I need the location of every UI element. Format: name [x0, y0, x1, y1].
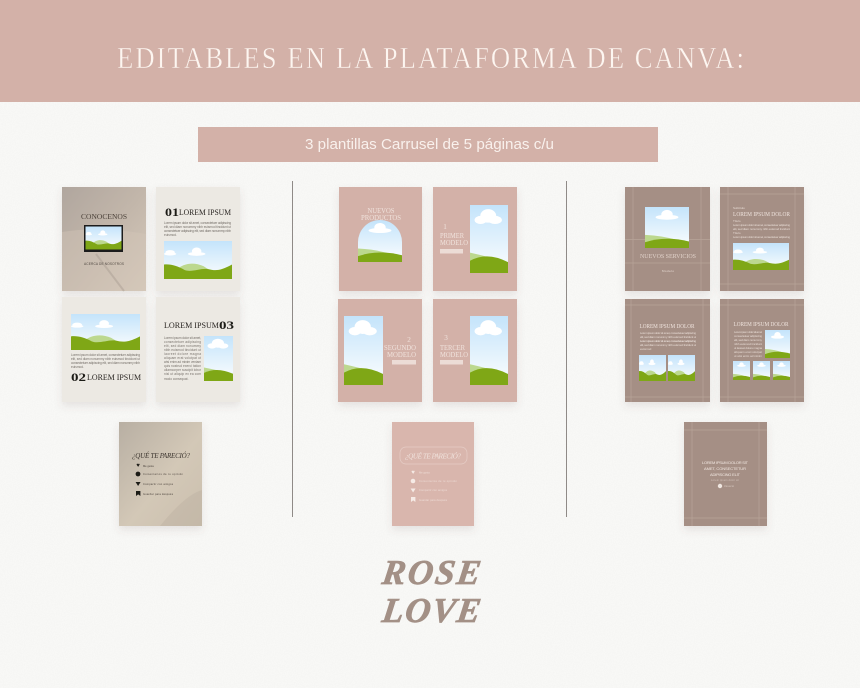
slide: lorem ipsum 03: wisi enim ad minim veniam — [164, 360, 201, 364]
slide: lorem ipsum 01: Lorem ipsum dolor sit amet, consectetuer adipiscing — [164, 221, 231, 225]
slide: taupe lorem one image — [720, 187, 804, 291]
slide: taupe lorem one image: LOREM IPSUM DOLOR — [733, 212, 790, 218]
slide: taupe lorem two images — [625, 299, 710, 402]
slide: lorem ipsum 03: consectetuer adipiscing — [164, 340, 201, 344]
slide: taupe lorem one image: elit, sed diam nonummy nibh euismod tincidunt — [733, 227, 790, 231]
column divider left — [292, 181, 294, 517]
slide: primer modelo — [433, 187, 517, 291]
panel: rose carousel — [338, 187, 517, 526]
slide: que te parecio beige: Me gusta — [143, 464, 154, 468]
slide: nuevos productos: PRODUCTOS — [361, 214, 401, 222]
slide: nuevos productos: NUEVOS — [368, 207, 394, 215]
slide: lorem ipsum 01: LOREM IPSUM — [179, 208, 232, 217]
slide: lorem ipsum 03: laoreet dolore magna — [164, 352, 201, 356]
slide: que te parecio beige: ♥ — [136, 463, 140, 469]
slide: conocenos cover — [62, 187, 146, 291]
slide: lorem ipsum 01 — [156, 187, 240, 291]
slide: que te parecio rose: Compartir con amigos — [419, 488, 448, 492]
slide: segundo modelo — [338, 299, 422, 402]
slide: lorem ipsum 03: aliquam erat volutpat ut — [164, 356, 201, 360]
slide: que te parecio rose: Guardar para después — [419, 498, 448, 502]
slide: nuevos productos — [339, 187, 422, 291]
slide: primer modelo: PRIMER — [440, 232, 464, 240]
slide: taupe lorem four images: aliquam erat volutpat — [734, 350, 762, 354]
slide: taupe lorem four images: Lorem ipsum dolor sit amet — [734, 330, 762, 334]
slide: tercer modelo: TERCER — [440, 344, 465, 352]
slide: tercer modelo — [433, 299, 517, 402]
logo: rose love: LOVE — [379, 591, 483, 630]
slide: taupe lorem four images: ut laoreet dolore magna — [734, 346, 762, 350]
slide: taupe lorem two images: elit, sed diam nonummy nibh euismod tincidunt ut — [640, 335, 696, 339]
slide: taupe lorem four images: ut wisi enim ad minim — [734, 354, 762, 358]
slide: taupe lorem one image: Título — [733, 219, 741, 223]
column divider right — [566, 181, 568, 517]
slide: que te parecio beige: Guardar para después — [143, 492, 174, 496]
slide: lorem ipsum 03: nibh euismod tincidunt ut — [164, 348, 201, 352]
slide: lorem ipsum 03: Lorem ipsum dolor sit amet, — [164, 336, 201, 340]
slide: primer modelo: 1 — [443, 223, 447, 231]
slide: tercer modelo: MODELO — [440, 351, 468, 359]
slide: lorem ipsum 02: LOREM IPSUM — [87, 373, 142, 382]
slide: taupe lorem four images: LOREM IPSUM DOLOR — [734, 322, 788, 328]
logo: rose love — [379, 553, 483, 630]
slide: lorem ipsum 02: elit, sed diam nonummy nibh euismod tincidunt ut — [71, 357, 140, 361]
slide: que te parecio rose — [392, 422, 474, 526]
slide: lorem ipsum 02: euismod. — [71, 365, 84, 369]
slide: lorem ipsum 03: elit, sed diam nonummy — [164, 344, 201, 348]
slide: lorem ipsum 03: nisl ut aliquip ex ea com — [164, 372, 201, 376]
slide: taupe closing: AMET, CONSECTETUR — [704, 466, 746, 471]
slide: lorem ipsum 01: 01 — [165, 207, 179, 219]
slide: taupe lorem one image: Lorem ipsum dolor sit amet, consectetuer adipiscing — [733, 223, 790, 227]
slide: que te parecio beige: Compartir con amigos — [143, 482, 174, 486]
slide: nuevos servicios — [625, 187, 710, 291]
slide: nuevos servicios: NUEVOS SERVICIOS — [640, 254, 696, 260]
slide: taupe closing: Usuario — [724, 485, 735, 488]
slide: taupe lorem one image: Lorem ipsum dolor sit amet, consectetuer adipiscing — [733, 235, 790, 239]
slide: lorem ipsum 03: ullamcorper suscipit lobor — [164, 368, 202, 372]
slide: lorem ipsum 02: consectetuer adipiscing elit, sed diam nonummy nibh — [71, 361, 140, 365]
slide: taupe lorem one image: Título — [733, 231, 741, 235]
slide: segundo modelo: SEGUNDO — [384, 344, 416, 352]
slide: lorem ipsum 02: Lorem ipsum dolor sit amet, consectetuer adipiscing — [71, 353, 140, 357]
slide: lorem ipsum 02: 02 — [71, 372, 86, 384]
slide: que te parecio rose: Me gusta — [419, 470, 430, 474]
slide: lorem ipsum 03: LOREM IPSUM — [164, 321, 220, 330]
slide: lorem ipsum 01: elit, sed diam nonummy nibh euismod tincidunt ut — [164, 225, 231, 229]
slide: lorem ipsum 03: quis nostrud exerci tation — [164, 364, 201, 368]
slide: lorem ipsum 03 — [156, 297, 240, 402]
slide: que te parecio beige — [119, 422, 202, 526]
slide: taupe closing: LOREM IPSUM DOLOR SIT — [702, 460, 749, 465]
slide: taupe closing — [684, 422, 767, 526]
slide: que te parecio rose: ♥ — [411, 470, 415, 476]
slide: taupe lorem two images: LOREM IPSUM DOLOR — [640, 324, 694, 330]
slide: taupe lorem two images: Lorem ipsum dolor sit amet, consectetuer adipiscing — [640, 339, 696, 343]
slide: conocenos cover: ACERCA DE NOSOTROS — [84, 262, 124, 266]
panel: beige carousel — [62, 187, 240, 526]
slide: que te parecio rose: Comentarios de tu opinión — [419, 479, 458, 483]
header band with title — [0, 0, 860, 102]
slide: que te parecio beige: ¿QUÉ TE PARECIÓ? — [132, 452, 190, 460]
slide: taupe lorem two images: euismod — [640, 347, 652, 351]
subtitle bar: 3 plantillas Carrusel de 5 páginas c/u — [305, 136, 554, 153]
slide: taupe lorem four images: nibh euismod tincidunt — [734, 342, 762, 346]
slide: tercer modelo: 3 — [444, 334, 448, 342]
slide: segundo modelo: MODELO — [387, 351, 416, 359]
slide: taupe lorem two images: Lorem ipsum dolor sit amet, consectetuer adipiscing — [640, 331, 696, 335]
slide: conocenos cover: CONOCENOS — [81, 212, 127, 221]
slide: taupe closing: ADIPISCING ELIT — [710, 472, 741, 477]
slide: taupe lorem two images: elit, sed diam nonummy nibh euismod tincidunt ut — [640, 343, 696, 347]
slide: primer modelo: MODELO — [440, 239, 468, 247]
slide: lorem ipsum 01: euismod. — [164, 233, 177, 237]
slide: taupe closing: Lorem ipsum dolor sit — [711, 479, 739, 482]
slide: taupe lorem four images: elit, sed diam nonummy — [734, 338, 762, 342]
slide: taupe lorem one image: Subtítulo — [733, 206, 745, 210]
slide: taupe lorem four images — [720, 299, 804, 402]
logo: rose love: ROSE — [379, 553, 483, 592]
slide: segundo modelo: 2 — [407, 336, 411, 344]
slide: taupe lorem four images: consectetuer adipiscing — [734, 334, 762, 338]
slide: lorem ipsum 03: modo consequat. — [164, 377, 189, 381]
slide: que te parecio beige: Comentarios de tu opinión — [143, 472, 184, 476]
subtitle bar — [198, 127, 658, 162]
slide: lorem ipsum 02 — [62, 297, 146, 402]
slide: lorem ipsum 03: 03 — [219, 320, 234, 332]
slide: lorem ipsum 01: consectetuer adipiscing elit, sed diam nonummy nibh — [164, 229, 231, 233]
slide: nuevos servicios: Modelo — [662, 269, 674, 273]
header band with title: EDITABLES EN LA PLATAFORMA DE CANVA: — [117, 41, 744, 76]
slide: que te parecio rose: ¿QUÉ TE PARECIÓ? — [405, 450, 461, 460]
panel: taupe carousel — [625, 187, 804, 526]
